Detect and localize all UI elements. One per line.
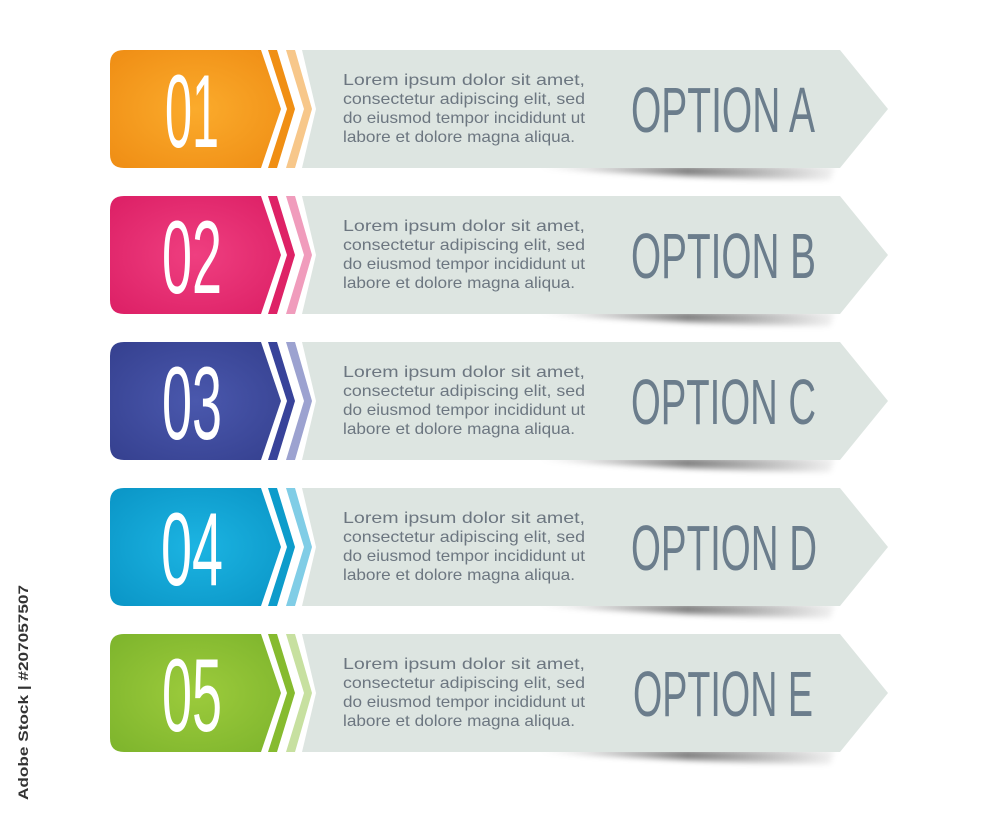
body text xyxy=(343,364,586,438)
row 2: option B xyxy=(110,196,888,326)
body text xyxy=(343,72,586,146)
row 3: option C xyxy=(110,342,888,472)
body text: labore et dolore magna aliqua. xyxy=(343,713,575,730)
gray arrow panel xyxy=(302,488,888,606)
number: 05 xyxy=(162,638,222,754)
option label: OPTION A xyxy=(631,74,815,146)
chevron stripes xyxy=(268,634,295,752)
body text: labore et dolore magna aliqua. xyxy=(343,275,575,292)
body text: do eiusmod tempor incididunt ut xyxy=(343,110,586,127)
number badge xyxy=(110,488,281,606)
row 1: option A xyxy=(110,50,888,180)
chevron stripes xyxy=(268,342,295,460)
chevron stripes xyxy=(268,50,295,168)
row 5: option E xyxy=(110,634,888,764)
body text xyxy=(343,218,586,292)
gray arrow panel xyxy=(302,634,888,752)
shadow xyxy=(540,750,835,764)
option label: OPTION E xyxy=(633,658,813,730)
number badge xyxy=(110,342,281,460)
body text: consectetur adipiscing elit, sed xyxy=(343,237,585,254)
number: 02 xyxy=(162,200,222,316)
body text: Lorem ipsum dolor sit amet, xyxy=(343,364,585,381)
option label: OPTION D xyxy=(631,512,817,584)
body text: do eiusmod tempor incididunt ut xyxy=(343,548,586,565)
gray arrow panel xyxy=(302,342,888,460)
body text: do eiusmod tempor incididunt ut xyxy=(343,256,586,273)
option label: OPTION B xyxy=(631,220,816,292)
watermark id text: Adobe Stock | #207057507 xyxy=(15,585,31,800)
body text: consectetur adipiscing elit, sed xyxy=(343,383,585,400)
body text: Lorem ipsum dolor sit amet, xyxy=(343,72,585,89)
shadow xyxy=(540,458,835,472)
number badge xyxy=(110,50,281,168)
shadow xyxy=(540,166,835,180)
chevron stripes xyxy=(268,196,295,314)
number badge xyxy=(110,196,281,314)
body text: consectetur adipiscing elit, sed xyxy=(343,529,585,546)
body text: labore et dolore magna aliqua. xyxy=(343,129,575,146)
body text xyxy=(343,510,586,584)
option label: OPTION C xyxy=(631,366,816,438)
body text: do eiusmod tempor incididunt ut xyxy=(343,402,586,419)
chevron stripes xyxy=(268,488,295,606)
body text: Lorem ipsum dolor sit amet, xyxy=(343,218,585,235)
row 1: option A: 01 xyxy=(165,54,219,170)
number: 04 xyxy=(161,492,223,608)
shadow xyxy=(540,604,835,618)
number badge xyxy=(110,634,281,752)
body text: Lorem ipsum dolor sit amet, xyxy=(343,656,585,673)
body text: do eiusmod tempor incididunt ut xyxy=(343,694,586,711)
body text: labore et dolore magna aliqua. xyxy=(343,421,575,438)
row 4: option D xyxy=(110,488,888,618)
body text: consectetur adipiscing elit, sed xyxy=(343,675,585,692)
shadow xyxy=(540,312,835,326)
body text: labore et dolore magna aliqua. xyxy=(343,567,575,584)
number: 03 xyxy=(162,346,222,462)
body text: Lorem ipsum dolor sit amet, xyxy=(343,510,585,527)
body text xyxy=(343,656,586,730)
gray arrow panel xyxy=(302,196,888,314)
gray arrow panel xyxy=(302,50,888,168)
body text: consectetur adipiscing elit, sed xyxy=(343,91,585,108)
